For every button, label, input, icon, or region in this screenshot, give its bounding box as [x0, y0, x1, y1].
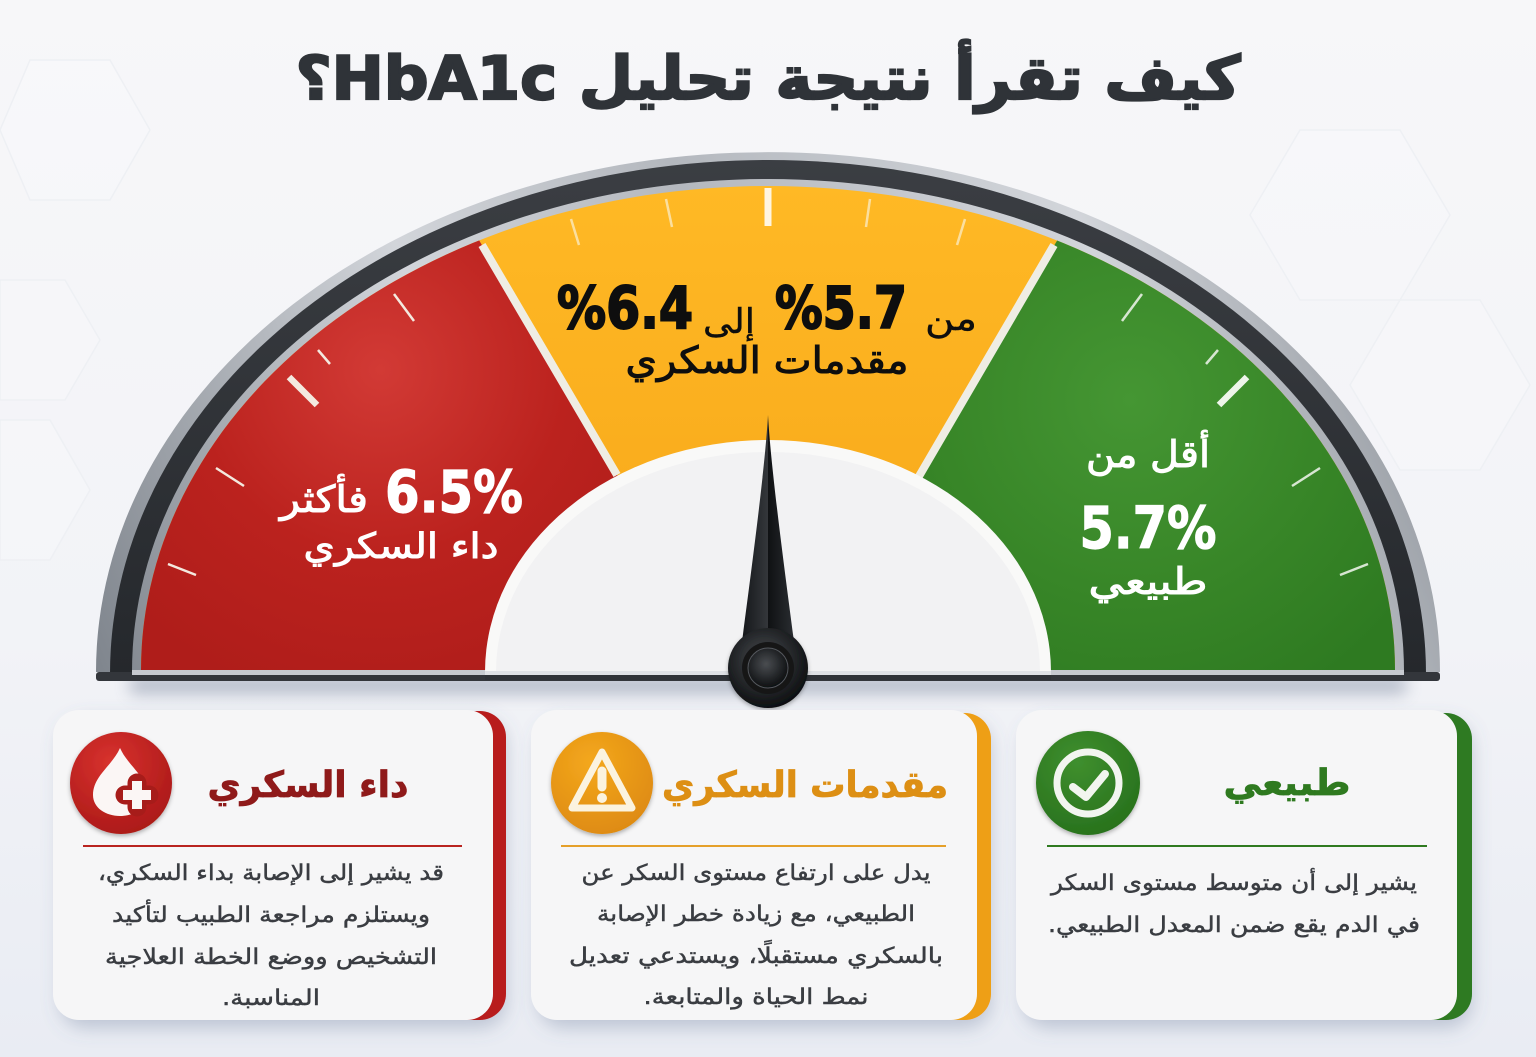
red zone label: 6.5% — [385, 458, 523, 526]
title: كيف تقرأ نتيجة تحليل HbA1c؟ — [295, 39, 1241, 114]
body text: ويستلزم مراجعة الطبيب لتأكيد — [112, 899, 430, 928]
amber zone label: مقدمات السكري — [626, 339, 908, 382]
heading: طبيعي — [1224, 763, 1350, 804]
icon: warning triangle — [551, 732, 653, 834]
red zone label: داء السكري — [304, 527, 498, 567]
icon: blood drop — [70, 732, 172, 834]
inner dial — [485, 440, 1051, 680]
needle hub — [728, 628, 808, 708]
green zone — [922, 240, 1395, 670]
amber zone label: إلى — [703, 302, 755, 342]
needle — [742, 415, 794, 642]
red zone label — [278, 458, 523, 567]
amber zone label — [557, 274, 977, 382]
red zone — [141, 240, 618, 670]
amber zone label: %5.7 — [775, 274, 907, 342]
body text: المناسبة. — [222, 986, 320, 1011]
gauge frame — [96, 152, 1440, 681]
body text: الطبيعي، مع زيادة خطر الإصابة — [597, 902, 915, 927]
panel: diabetes — [53, 710, 506, 1020]
body text: يدل على ارتفاع مستوى السكر عن — [582, 861, 930, 886]
green zone label: 5.7% — [1080, 494, 1216, 562]
red zone label: فأكثر — [278, 474, 368, 521]
panel: prediabetes — [531, 710, 991, 1020]
body text: قد يشير إلى الإصابة بداء السكري، — [98, 861, 444, 886]
amber zone label: من — [925, 299, 977, 339]
tick marks — [168, 188, 1368, 575]
amber zone label: %6.4 — [557, 274, 693, 342]
green zone label: أقل من — [1086, 430, 1210, 476]
body text: نمط الحياة والمتابعة. — [644, 985, 868, 1010]
green zone label — [1080, 430, 1216, 603]
icon: check mark — [1036, 731, 1140, 835]
heading: داء السكري — [208, 765, 408, 806]
body text: التشخيص ووضع الخطة العلاجية — [105, 945, 437, 970]
body text: يشير إلى أن متوسط مستوى السكر — [1050, 868, 1417, 896]
green zone label: طبيعي — [1088, 560, 1208, 603]
amber zone — [141, 186, 1395, 670]
body text: بالسكري مستقبلًا، ويستدعي تعديل — [569, 939, 943, 969]
white dividers — [482, 245, 1054, 478]
gauge zones — [141, 186, 1395, 670]
body text — [1048, 868, 1420, 938]
body text: في الدم يقع ضمن المعدل الطبيعي. — [1048, 913, 1420, 938]
body text — [569, 861, 943, 1010]
body text — [98, 861, 444, 1011]
panel: normal — [1016, 710, 1472, 1020]
gauge — [96, 152, 1440, 708]
heading: مقدمات السكري — [662, 765, 948, 806]
